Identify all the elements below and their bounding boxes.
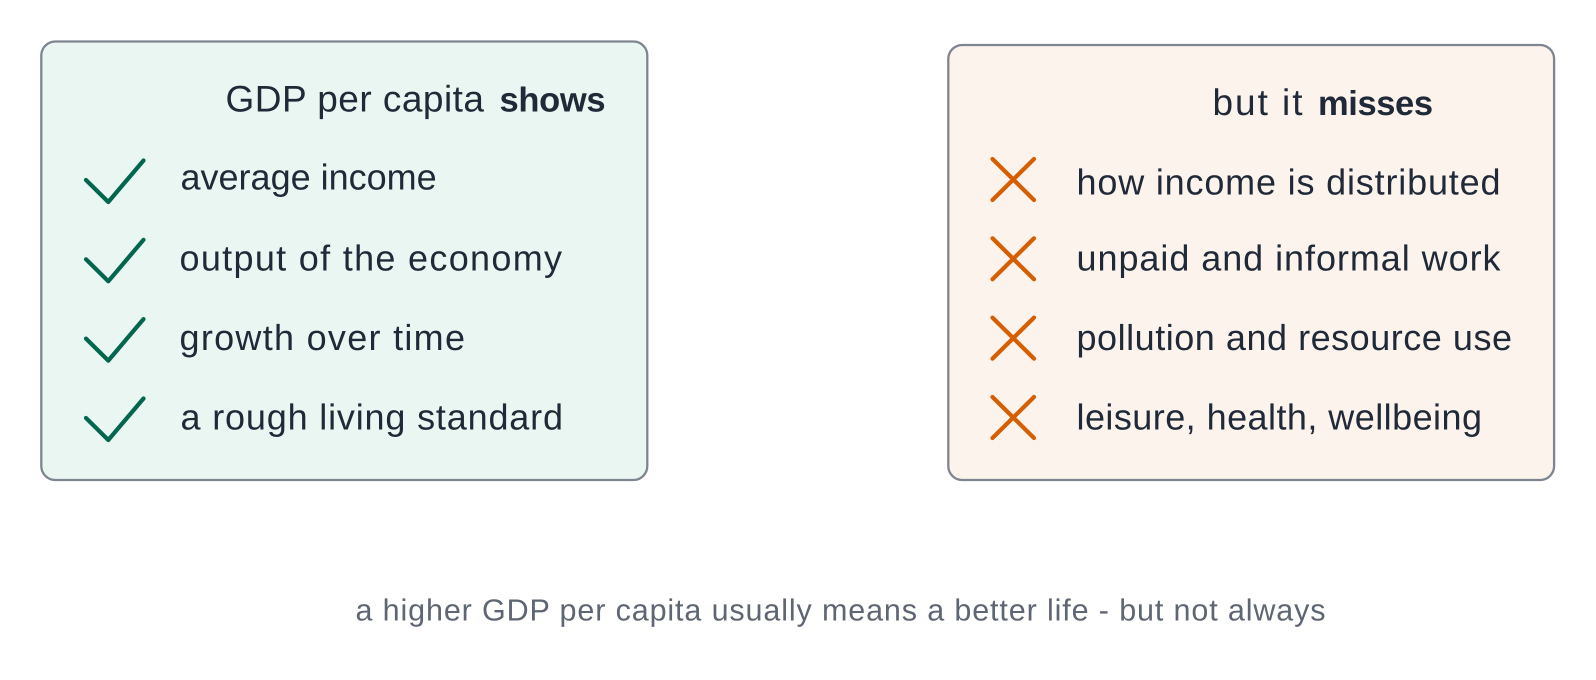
heading: but it misses: but it — [1212, 82, 1303, 123]
heading: but it misses — [1212, 82, 1433, 123]
text: growth over time: growth over time — [180, 317, 465, 358]
text: how income is distributed: how income is distributed — [1076, 162, 1500, 203]
text: average income: average income — [180, 157, 437, 198]
icon: check mark 3 — [86, 319, 144, 361]
text: output of the economy: output of the economy — [180, 237, 562, 278]
heading: GDP per capita shows: GDP per capita — [226, 79, 484, 120]
icon: cross 2 — [992, 238, 1034, 279]
text: unpaid and informal work: unpaid and informal work — [1076, 237, 1502, 278]
panel background: shows — [41, 42, 647, 480]
panel background: misses — [948, 45, 1554, 480]
icon: cross 3 — [992, 318, 1034, 359]
text: leisure, health, wellbeing: leisure, health, wellbeing — [1076, 397, 1482, 438]
panel: what GDP per capita shows — [41, 42, 647, 480]
heading: but it misses: misses — [1318, 85, 1433, 123]
panel: what GDP per capita misses — [948, 45, 1554, 480]
icon: cross 4 — [992, 397, 1034, 438]
icon: check mark 4 — [86, 398, 144, 440]
text: pollution and resource use: pollution and resource use — [1076, 317, 1512, 358]
footer caption: a higher GDP per capita usually means a better life - but not always — [356, 593, 1326, 627]
heading: GDP per capita shows — [226, 79, 606, 120]
icon: check mark 2 — [86, 240, 144, 281]
heading: GDP per capita shows: shows — [500, 82, 606, 120]
icon: cross 1 — [992, 159, 1034, 200]
icon: check mark 1 — [86, 160, 144, 202]
text: a rough living standard: a rough living standard — [180, 397, 563, 438]
